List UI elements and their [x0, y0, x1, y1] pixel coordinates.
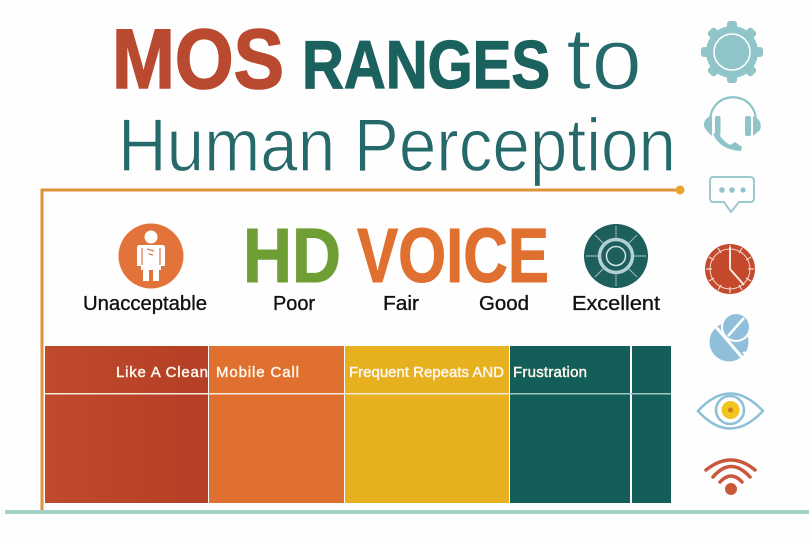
icon: gear	[701, 21, 763, 83]
heading: HD VOICE	[243, 213, 549, 299]
band text: Mobile Call: Mobile Call	[216, 364, 299, 381]
band: yellow	[345, 346, 509, 503]
label: Fair: Fair	[383, 293, 419, 315]
icon: chat bubble	[710, 177, 754, 212]
orange connector line	[42, 186, 684, 510]
band text: Frequent Repeats AND: Frequent Repeats AND	[349, 364, 504, 381]
icon: clock	[705, 244, 755, 294]
label: Good: Good	[479, 293, 529, 315]
title word: to: to	[566, 9, 642, 108]
band text	[116, 364, 587, 381]
baseline rule	[5, 510, 809, 514]
band: dark teal narrow	[632, 346, 671, 503]
title line: Human Perception: Human Perception	[118, 103, 676, 187]
title	[112, 9, 676, 187]
label: Poor: Poor	[273, 293, 315, 315]
icon: split pill	[710, 312, 758, 364]
title word: MOS: MOS	[112, 12, 284, 106]
title word: RANGES: RANGES	[302, 27, 550, 103]
band: red	[45, 346, 208, 503]
scale labels	[83, 293, 660, 315]
VOICE: VOICE	[357, 213, 549, 299]
label: Excellent: Excellent	[572, 293, 660, 315]
band: dark teal	[510, 346, 630, 503]
band text: Like A Clean: Like A Clean	[116, 364, 208, 381]
band text: Frustration: Frustration	[513, 364, 587, 381]
icon: teal dial badge	[584, 224, 648, 288]
HD: HD	[243, 213, 341, 299]
label: Unacceptable: Unacceptable	[83, 293, 207, 315]
band: orange	[209, 346, 344, 503]
icon: wifi	[706, 460, 755, 495]
colour band chart	[45, 346, 671, 503]
icon: person badge	[118, 224, 184, 288]
icon: headset	[704, 97, 761, 151]
icon: eye	[698, 394, 763, 428]
